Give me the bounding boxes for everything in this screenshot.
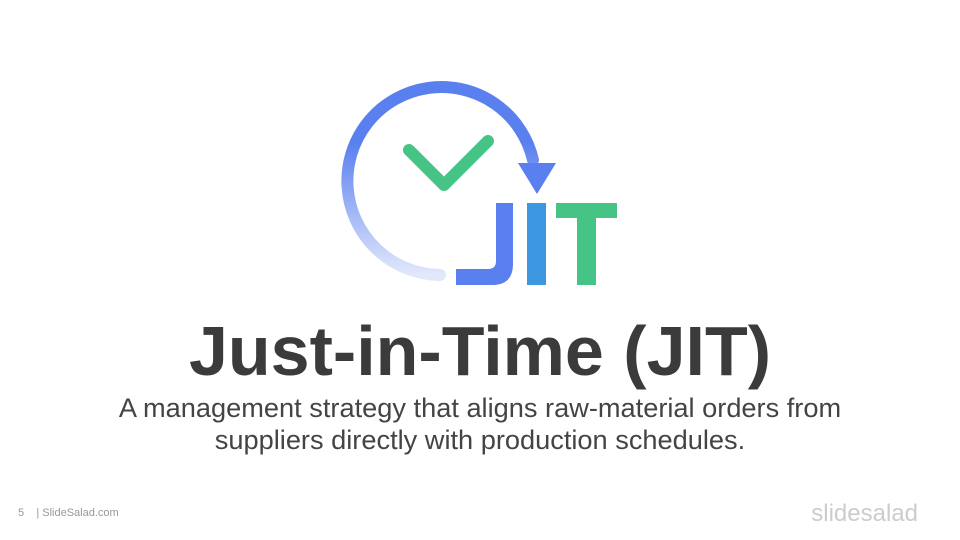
footer page number: 5 | SlideSalad.com: [18, 507, 119, 519]
arc arrow: [347, 87, 556, 275]
letters JIT: [456, 203, 617, 285]
title: Just-in-Time (JIT): [189, 312, 771, 390]
footer logo: slidesalad: [811, 500, 918, 527]
subtitle: A management strategy that aligns raw-material orders from: [119, 392, 841, 423]
subtitle: [119, 392, 841, 455]
checkmark: [409, 141, 488, 185]
icon: JIT clock logo: [341, 81, 617, 285]
subtitle: suppliers directly with production schedules.: [215, 424, 745, 455]
